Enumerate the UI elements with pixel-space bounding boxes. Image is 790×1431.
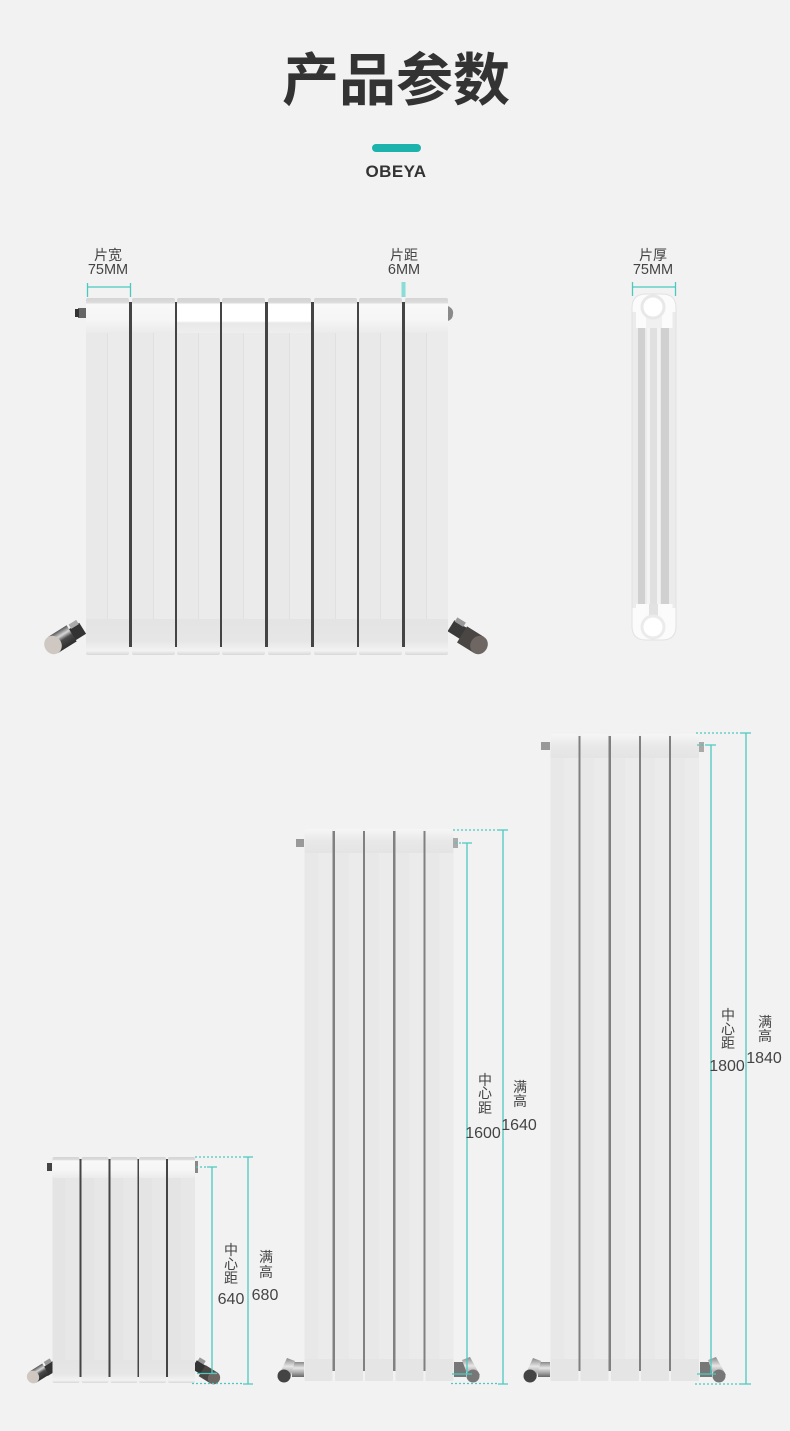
- centre distance label: 1600: [465, 1125, 501, 1142]
- radiator columns: [52, 1157, 195, 1383]
- full height label: [252, 1249, 278, 1304]
- right valve: [454, 1357, 480, 1382]
- panel: 680 radiator: [24, 1157, 278, 1387]
- centre distance label: 心: [478, 1085, 492, 1101]
- centre distance label: 640: [218, 1291, 244, 1308]
- left valve: [41, 619, 87, 658]
- height dimensions: [192, 1157, 253, 1384]
- left air vent: [75, 308, 86, 318]
- air vents: [47, 1161, 198, 1173]
- fins: [632, 312, 676, 613]
- radiator gaps: [332, 831, 426, 1371]
- height dimensions: [695, 733, 751, 1384]
- brand name: OBEYA: [366, 162, 426, 181]
- radiator gaps: [578, 736, 671, 1371]
- left valve: [524, 1358, 550, 1382]
- radiator gaps: [80, 1159, 168, 1377]
- full height label: 满: [513, 1079, 527, 1095]
- accent bar: [372, 144, 421, 152]
- title: 产品参数: [282, 35, 510, 117]
- spacing dimension: 片距: [390, 247, 418, 263]
- spacing dimension: [388, 247, 420, 297]
- centre distance label: 中: [478, 1072, 492, 1088]
- radiator columns: [550, 734, 699, 1381]
- panel: side view profile: [632, 247, 676, 640]
- centre distance label: 中: [224, 1242, 238, 1258]
- full height label: 680: [252, 1287, 278, 1304]
- bottom tube: [642, 604, 664, 638]
- full height label: [501, 1079, 537, 1134]
- left valve: [278, 1358, 304, 1382]
- centre distance label: 中: [721, 1007, 735, 1023]
- profile body: [632, 294, 676, 640]
- full height label: 高: [259, 1264, 273, 1280]
- spacing dimension: 6MM: [388, 262, 420, 278]
- air vents: [296, 838, 458, 848]
- centre distance label: 距: [224, 1270, 238, 1286]
- panel: 1640 radiator: [278, 829, 537, 1384]
- full height label: [746, 1014, 782, 1067]
- width dimension: 片宽: [94, 247, 122, 263]
- centre distance label: 心: [224, 1256, 238, 1272]
- right valve: [445, 617, 493, 658]
- panel: 1840 radiator: [524, 733, 782, 1384]
- radiator columns: [304, 829, 454, 1381]
- full height label: 高: [513, 1093, 527, 1109]
- radiator columns: [86, 298, 448, 655]
- centre distance label: [218, 1242, 244, 1308]
- height dimensions: [451, 830, 508, 1384]
- thickness dimension: 75MM: [633, 262, 673, 278]
- right valve: [190, 1357, 224, 1387]
- centre distance label: [709, 1007, 745, 1075]
- panel: front view radiator: [41, 247, 493, 658]
- top tube: [642, 296, 664, 328]
- radiator gap shadows: [129, 302, 405, 647]
- full height label: 满: [259, 1249, 273, 1265]
- centre distance label: 心: [721, 1021, 735, 1037]
- centre distance label: 距: [478, 1100, 492, 1116]
- right valve: [700, 1357, 726, 1382]
- full height label: 1640: [501, 1117, 537, 1134]
- width dimension: [88, 247, 130, 297]
- centre distance label: 1800: [709, 1058, 745, 1075]
- thickness dimension: [632, 247, 676, 296]
- thickness dimension: 片厚: [639, 247, 667, 263]
- full height label: 满: [758, 1014, 772, 1030]
- full height label: 高: [758, 1028, 772, 1044]
- width dimension: 75MM: [88, 262, 128, 278]
- air vents: [541, 742, 704, 752]
- centre distance label: 距: [721, 1035, 735, 1051]
- full height label: 1840: [746, 1050, 782, 1067]
- centre distance label: [465, 1072, 501, 1142]
- left valve: [24, 1357, 59, 1386]
- right air vent: [448, 306, 453, 321]
